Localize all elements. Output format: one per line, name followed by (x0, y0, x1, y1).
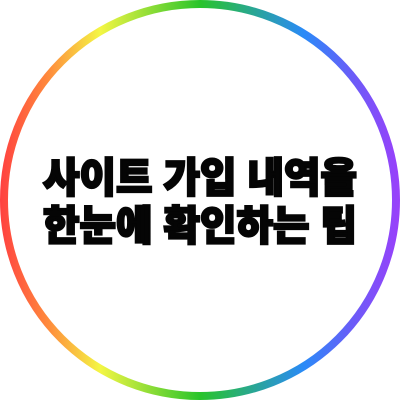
title (43, 155, 357, 249)
title line 1: 사이트 가입 내역을 (43, 155, 357, 201)
title line 2: 한눈에 확인하는 팁 (43, 203, 357, 249)
